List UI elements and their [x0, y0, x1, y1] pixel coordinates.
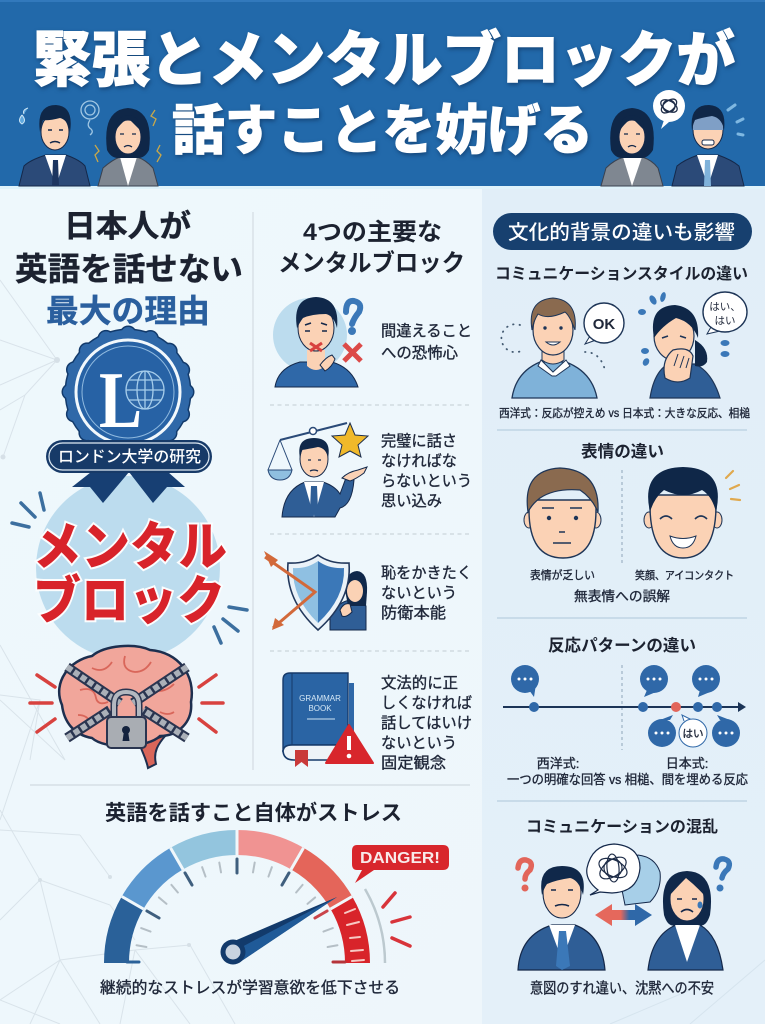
- stress gauge: [116, 830, 449, 964]
- heading: stress: 英語を話すこと自体がストレス: [105, 801, 402, 825]
- text: [381, 322, 472, 362]
- pale circle behind mental block: [36, 476, 220, 660]
- heading: mental block in red: メンタル: [33, 519, 227, 577]
- heading: four main blocks: [278, 219, 465, 277]
- icon: japanese woman nodding: はい: [714, 315, 736, 327]
- caption: 西洋式：反応が控えめ vs 日本式：大きな反応、相槌: [499, 406, 750, 420]
- text: [381, 564, 472, 622]
- block 3: shame defence: [264, 551, 472, 630]
- text: 間違えること: [381, 322, 472, 340]
- heading: four main blocks: 4つの主要な: [303, 219, 442, 246]
- icon: dizzy spiral: [81, 101, 99, 135]
- title: 緊張とメンタルブロックが: [33, 27, 735, 94]
- icon: shield, woman and deflected arrow: [264, 551, 367, 630]
- pill heading: culture: [493, 213, 752, 250]
- right column background: [482, 186, 765, 1024]
- needle: [220, 897, 337, 964]
- icon: japanese woman nodding: はい、: [709, 301, 741, 313]
- section: communication style: [495, 264, 750, 420]
- section: communication style: コミュニケーションスタイルの違い: [495, 264, 748, 283]
- text: 完璧に話さ: [381, 432, 457, 450]
- icon: grammar book with warning: [283, 673, 373, 767]
- section: response pattern: 日本式:: [666, 756, 708, 771]
- caption: 意図のすれ違い、沈黙への不安: [530, 980, 714, 997]
- text: らないという: [381, 472, 472, 490]
- badge: University of London: [46, 328, 212, 503]
- speech bubbles: [511, 665, 740, 747]
- section: response pattern: 反応パターンの違い: [548, 635, 696, 655]
- icon: nervous man left: [19, 105, 90, 186]
- icon: grammar book with warning: BOOK: [308, 704, 332, 713]
- icon: confused man: [518, 866, 605, 970]
- title: 話すことを妨げる: [172, 101, 593, 161]
- block 1: fear of mistakes: [273, 297, 472, 387]
- badge: University of London: L: [99, 357, 142, 445]
- emphasis dashes: [12, 493, 247, 643]
- heading: mental block in red: [33, 519, 227, 631]
- icon: western man with OK: OK: [593, 316, 615, 333]
- ribbon label: ロンドン大学の研究: [58, 448, 201, 466]
- section: facial expression: 笑顔、アイコンタクト: [635, 568, 734, 582]
- icon: man with scales and star: [268, 423, 368, 517]
- icon: smiling face: [644, 467, 740, 558]
- caption: stress: 継続的なストレスが学習意欲を低下させる: [100, 979, 400, 997]
- heading: biggest reason: 最大の理由: [46, 293, 210, 329]
- icon: nervous woman left: [95, 108, 161, 186]
- section: response pattern: [503, 635, 748, 787]
- icon: anxious woman: [648, 871, 723, 970]
- DANGER callout: [352, 845, 449, 883]
- icon: tangled speech bubbles: [587, 844, 660, 905]
- icon: japanese woman nodding: [638, 291, 747, 398]
- timeline: [503, 702, 746, 712]
- icon: western man with OK: [501, 298, 624, 398]
- text: 文法的に正: [381, 674, 458, 692]
- icon: anxious woman right: [601, 108, 663, 186]
- section: facial expression: 表情の違い: [581, 441, 664, 461]
- icon: expressionless face: [524, 468, 601, 558]
- double arrow: [595, 904, 652, 926]
- icon: question marks: [518, 859, 729, 879]
- ribbon label: [46, 440, 212, 473]
- text: ないという: [381, 734, 457, 752]
- text: 思い込み: [381, 492, 442, 510]
- left column divider: [252, 212, 254, 770]
- title: [33, 27, 735, 161]
- DANGER callout: DANGER!: [360, 850, 440, 867]
- section: response pattern: 一つの明確な回答 vs 相槌、間を埋める反応: [507, 772, 748, 787]
- text: ないという: [381, 584, 457, 602]
- icon: stressed man right: [672, 105, 744, 186]
- text: 恥をかきたく: [381, 564, 472, 582]
- heading: four main blocks: メンタルブロック: [278, 249, 465, 277]
- section: communication confusion: コミュニケーションの混乱: [526, 818, 718, 836]
- text: 防衛本能: [381, 604, 446, 622]
- heading: biggest reason: [15, 209, 243, 329]
- section: facial expression: 無表情への誤解: [574, 589, 670, 604]
- block 4: grammar fixation: [283, 673, 472, 772]
- pill heading: culture: 文化的背景の違いも影響: [508, 221, 735, 244]
- icon: thought bubble tangled: [653, 90, 685, 129]
- はい bubble: はい: [682, 728, 704, 740]
- icon: worried man with question mark: [273, 297, 361, 387]
- block 2: perfectionism: [268, 423, 472, 517]
- captions: 西洋式:: [537, 756, 579, 771]
- heading: biggest reason: 英語を話せない: [15, 251, 243, 287]
- text: 固定観念: [381, 754, 446, 772]
- section: facial expression: [524, 441, 740, 604]
- text: しくなければ: [381, 694, 472, 712]
- section: communication confusion: [518, 818, 729, 997]
- icon: grammar book with warning: GRAMMAR: [299, 694, 341, 703]
- text: なければな: [381, 452, 457, 470]
- text: 話してはいけ: [381, 714, 472, 732]
- はい bubble: [679, 715, 707, 747]
- captions: 表情が乏しい: [530, 568, 595, 582]
- text: への恐怖心: [381, 344, 458, 362]
- heading: biggest reason: 日本人が: [64, 209, 191, 244]
- heading: mental block in red: ブロック: [33, 572, 225, 631]
- header banner: [0, 0, 765, 189]
- text: [381, 432, 472, 510]
- text: [381, 674, 472, 772]
- icon: brain chained with padlock: [30, 646, 223, 768]
